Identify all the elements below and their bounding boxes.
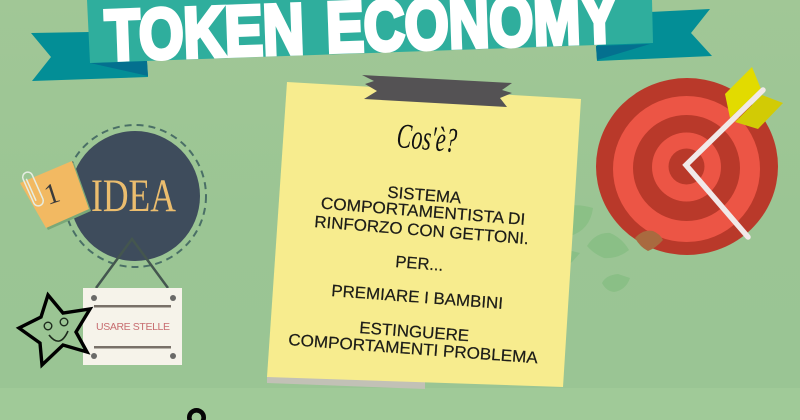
smiling star [19, 295, 90, 365]
description text [288, 184, 538, 367]
arrow fletching [725, 67, 783, 129]
sticky note curled shadow [267, 376, 425, 389]
hanging sign [83, 288, 182, 365]
description text: COMPORTAMENTISTA DI [320, 195, 526, 229]
paperclip [21, 171, 45, 207]
decorative leaves [560, 205, 630, 292]
dark circle [70, 131, 200, 261]
brown leaf over target [635, 231, 663, 251]
description text: PREMIARE I BAMBINI [331, 282, 504, 313]
sticky note paper [267, 82, 581, 387]
sign label: USARE STELLE [96, 321, 170, 333]
sticky note [267, 75, 581, 389]
description text: SISTEMA [387, 184, 462, 207]
arrow shaft [686, 90, 763, 237]
sign strings [96, 239, 168, 288]
IDEA label: IDEA [91, 170, 176, 222]
dashed ring [64, 125, 206, 267]
description text: ESTINGUERE [359, 319, 470, 345]
title text [104, 0, 619, 76]
number note [20, 161, 91, 230]
black curl at bottom [189, 410, 204, 420]
idea badge [20, 125, 206, 288]
description text: RINFORZO CON GETTONI. [314, 213, 529, 248]
left ribbon tail [31, 32, 148, 81]
tape [362, 75, 512, 107]
right ribbon tail [596, 9, 712, 61]
target with arrow [596, 67, 783, 255]
number note: 1 [40, 177, 64, 212]
heading: Cos'è?: Cos'è? [395, 116, 459, 160]
banner band [87, 0, 653, 63]
description text: COMPORTAMENTI PROBLEMA [288, 331, 538, 367]
description text: PER... [395, 253, 444, 275]
bullseye rings [596, 78, 778, 255]
title banner [31, 0, 712, 81]
